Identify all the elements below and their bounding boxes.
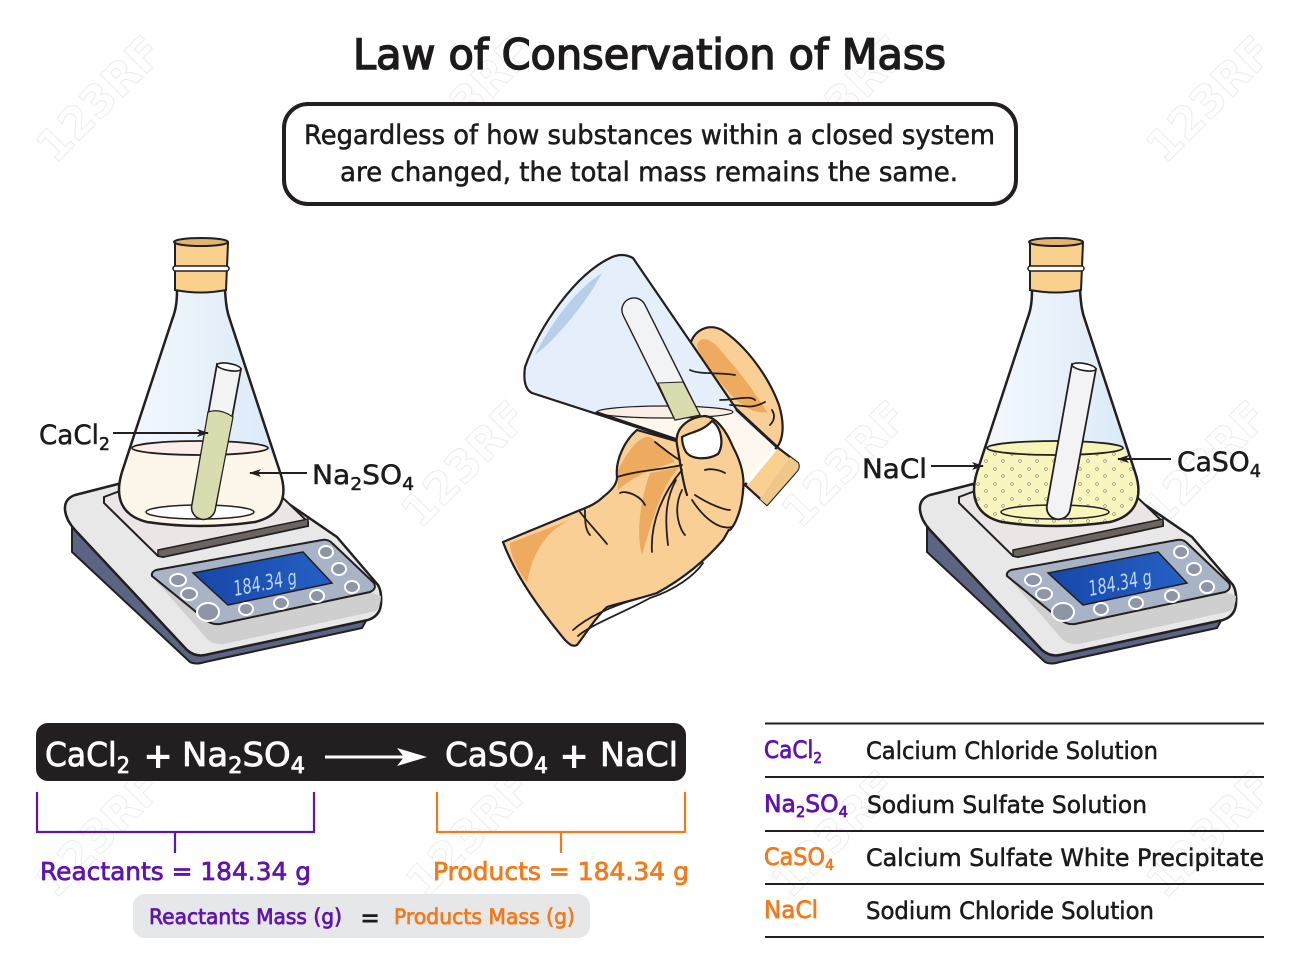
label: Na2SO4: 2 bbox=[350, 474, 362, 495]
row: NaCl: NaCl bbox=[764, 896, 818, 924]
row: CaSO4: 4 bbox=[825, 856, 834, 874]
row: Na2SO4: Sodium Sulfate Solution bbox=[867, 791, 1147, 819]
hand palm and wrist bbox=[503, 430, 743, 646]
icon: digital scale: 184.34 g bbox=[231, 565, 299, 601]
chemical equation bar: + bbox=[143, 736, 173, 777]
watermark pattern: 123RF bbox=[1132, 392, 1278, 538]
icon: conical flask with precipitate bbox=[974, 238, 1138, 526]
reactants formula: 2 bbox=[117, 754, 130, 779]
thumbnail bbox=[682, 421, 721, 458]
chemical equation bar: SO bbox=[242, 735, 291, 774]
finger shading bbox=[697, 339, 767, 412]
right illustration: flask with products on scale bbox=[862, 238, 1261, 664]
row: CaCl2: CaCl bbox=[764, 736, 819, 764]
row: Na2SO4: 2 bbox=[796, 803, 805, 821]
legend table bbox=[764, 724, 1264, 937]
chemical equation bar: Na bbox=[182, 735, 227, 774]
products formula: CaSO bbox=[445, 735, 535, 774]
reactants bracket bbox=[37, 792, 314, 853]
row: CaSO4: Calcium Sulfate White Precipitate bbox=[866, 844, 1264, 872]
flask highlight bbox=[535, 273, 602, 355]
row: CaCl2: 2 bbox=[813, 749, 822, 767]
label: CaCl2: CaCl bbox=[39, 420, 101, 451]
hand creases bbox=[573, 370, 774, 636]
test tube bbox=[622, 298, 700, 420]
watermark pattern: 123RF bbox=[1137, 27, 1283, 173]
products bracket bbox=[437, 792, 685, 853]
definition callout bbox=[284, 104, 1016, 204]
icon: digital scale bbox=[920, 483, 1236, 664]
row: NaCl: Sodium Chloride Solution bbox=[866, 897, 1154, 925]
chemical equation bar: 4 bbox=[291, 754, 305, 779]
reactants mass: Reactants = 184.34 g bbox=[40, 857, 311, 886]
icon: conical flask with test tube bbox=[119, 238, 283, 526]
products formula: 4 bbox=[534, 754, 548, 779]
title: Law of Conservation of Mass bbox=[353, 30, 946, 79]
chemical equation bar: 2 bbox=[228, 754, 242, 779]
left illustration: flask with reactants on scale bbox=[39, 238, 414, 664]
watermark pattern: 123RF bbox=[397, 762, 543, 908]
mass equality pill bbox=[133, 894, 590, 938]
mass equality pill: Reactants Mass (g) bbox=[149, 905, 342, 929]
icon: digital scale bbox=[65, 483, 381, 664]
label: CaSO4: 4 bbox=[1250, 461, 1261, 482]
tilted flask bbox=[524, 255, 777, 485]
chemical equation bar: NaCl bbox=[600, 735, 678, 774]
chemical equation bar: + bbox=[559, 736, 589, 777]
center illustration: hand tilting the flask bbox=[503, 255, 799, 646]
watermark pattern: 123RF bbox=[772, 27, 918, 173]
reaction arrow bbox=[325, 748, 427, 766]
label: CaCl2: 2 bbox=[99, 434, 110, 455]
label: CaSO4: CaSO bbox=[1177, 447, 1251, 478]
definition callout: are changed, the total mass remains the same. bbox=[340, 157, 958, 188]
watermark pattern: 123RF bbox=[772, 392, 918, 538]
mass equality pill: = bbox=[360, 904, 380, 932]
watermark pattern: 123RF bbox=[392, 392, 538, 538]
watermark pattern: 123RF bbox=[397, 27, 543, 173]
cork bbox=[745, 447, 799, 505]
row: Na2SO4: Na bbox=[764, 790, 797, 818]
watermark pattern: 123RF bbox=[1137, 762, 1283, 908]
label: Na2SO4: SO bbox=[362, 460, 402, 491]
reactants formula: CaCl bbox=[45, 735, 120, 774]
mass equality pill: Products Mass (g) bbox=[394, 905, 575, 929]
row: Na2SO4: SO bbox=[805, 790, 839, 818]
row: Na2SO4 bbox=[764, 790, 1147, 821]
tilted liquid bbox=[597, 412, 775, 483]
definition callout: Regardless of how substances within a closed system bbox=[304, 120, 995, 151]
label: Na2SO4 bbox=[250, 460, 414, 495]
watermark pattern: 123RF bbox=[27, 762, 173, 908]
row: CaSO4: CaSO bbox=[764, 843, 830, 871]
label: NaCl: NaCl bbox=[862, 454, 927, 485]
row: CaCl2: Calcium Chloride Solution bbox=[866, 737, 1158, 765]
label: Na2SO4: 4 bbox=[402, 474, 414, 495]
row: Na2SO4: 4 bbox=[839, 803, 848, 821]
label: NaCl bbox=[862, 454, 983, 485]
label: Na2SO4: Na bbox=[312, 460, 349, 491]
products mass: Products = 184.34 g bbox=[433, 857, 689, 886]
label: CaSO4 bbox=[1118, 447, 1261, 482]
watermark pattern: 123RF bbox=[762, 762, 908, 908]
hand shading bbox=[510, 437, 680, 583]
thumb bbox=[677, 416, 743, 530]
label: CaCl2 bbox=[39, 420, 208, 455]
chemical equation bar bbox=[36, 723, 686, 781]
row: CaCl2 bbox=[764, 736, 1158, 767]
back fingers bbox=[690, 327, 783, 447]
icon: digital scale: 184.34 g bbox=[1086, 565, 1154, 601]
watermark pattern: 123RF bbox=[27, 27, 173, 173]
row: NaCl bbox=[764, 896, 1154, 925]
